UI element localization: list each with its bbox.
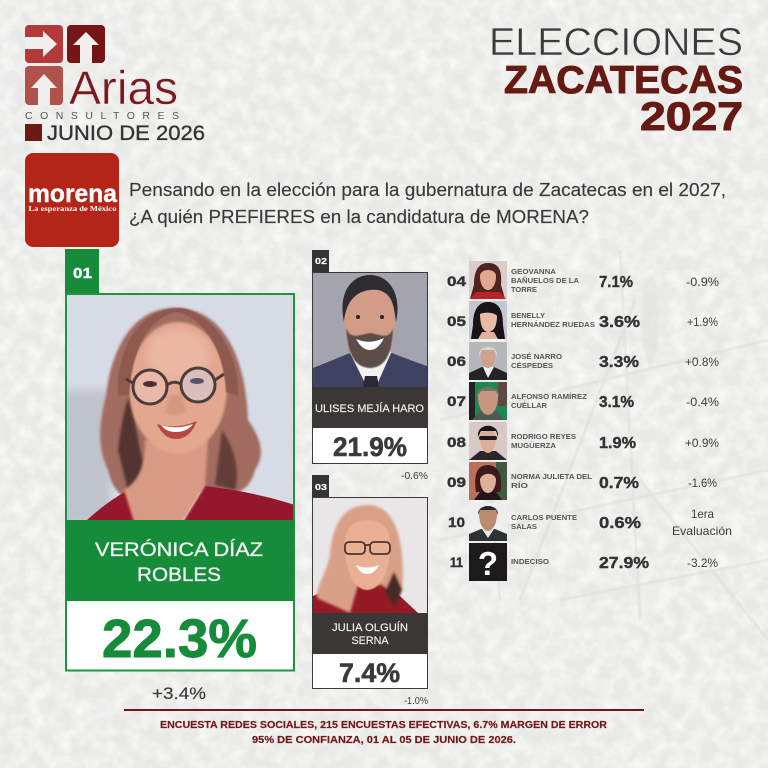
row 08 Rodrigo: 1.9% — [599, 435, 636, 452]
logo: morena: La esperanza de México — [28, 204, 117, 213]
title: ZACATECAS — [504, 59, 743, 102]
hair front — [118, 308, 238, 396]
percentage: 21.9% — [333, 432, 407, 462]
change: third place: -1.0% — [404, 695, 428, 707]
rank tab 02: 02 — [315, 257, 328, 266]
row 11 Indeciso — [450, 543, 718, 582]
footer methodology note — [160, 719, 607, 746]
row 05 Benelly: 05 — [447, 313, 466, 329]
name band — [66, 520, 294, 601]
row 05 Benelly — [447, 301, 718, 339]
icon: up arrow tile — [67, 25, 105, 63]
footer methodology note: ENCUESTA REDES SOCIALES, 215 ENCUESTAS EFECTIVAS, 6.7% MARGEN DE ERROR — [160, 719, 607, 731]
thumbnail: Alfonso — [469, 382, 507, 420]
row 07 Alfonso: -0.4% — [686, 397, 719, 409]
logo: morena — [25, 153, 119, 247]
rank tab 01: 01 — [73, 265, 92, 282]
row 04 Geovanna: -0.9% — [686, 277, 719, 289]
row 05 Benelly: BENELLY — [511, 311, 545, 320]
percentage: 7.4% — [339, 658, 400, 688]
portrait: Julia — [313, 498, 427, 613]
name band — [312, 613, 428, 654]
row 08 Rodrigo: MUGÜERZA — [511, 441, 557, 450]
name band: ULISES MEJÍA HARO — [315, 402, 424, 415]
thumbnail: Benelly — [469, 301, 507, 339]
panel: second place Ulises Mejía Haro — [312, 250, 428, 464]
row 09 Norma — [447, 462, 717, 500]
row 05 Benelly: HERNÁNDEZ RUEDAS — [511, 320, 595, 329]
rank tab 03: 03 — [315, 483, 328, 492]
row 04 Geovanna: 7.1% — [599, 274, 633, 291]
portrait: Verónica — [60, 295, 295, 525]
row 05 Benelly: 3.6% — [599, 314, 640, 331]
row 09 Norma: RÍO — [511, 481, 528, 490]
thumbnail: Rodrigo — [469, 422, 507, 460]
row 06 José Narro: JOSÉ NARRO — [511, 352, 562, 361]
title — [489, 21, 743, 139]
icon: up arrow light tile — [25, 66, 63, 105]
row 09 Norma: 09 — [447, 474, 466, 490]
percentage: 22.3% — [102, 609, 257, 669]
row 04 Geovanna: TORRE — [511, 285, 537, 294]
row 04 Geovanna: GEOVANNA — [511, 267, 557, 276]
footer rule — [124, 709, 644, 711]
thumbnail: Geovanna — [469, 261, 507, 299]
row 04 Geovanna: BAÑUELOS DE LA — [511, 276, 580, 285]
footer methodology note: 95% DE CONFIANZA, 01 AL 05 DE JUNIO DE 2026. — [252, 734, 516, 746]
row 10 Carlos: 10 — [448, 514, 465, 530]
panel: first place Verónica Díaz Robles — [60, 249, 295, 670]
row 08 Rodrigo: 08 — [447, 434, 466, 450]
row 10 Carlos — [448, 503, 732, 541]
row 11 Indeciso: INDECISO — [511, 557, 549, 566]
logo wordmark: Arias — [69, 61, 178, 114]
row 07 Alfonso — [447, 382, 719, 420]
portrait: Ulises — [313, 273, 427, 387]
row 11 Indeciso: 11 — [450, 554, 463, 570]
rank tab 02 — [312, 250, 329, 273]
blouse — [87, 492, 136, 520]
mouth — [157, 421, 197, 439]
rank tab 03 — [312, 475, 329, 498]
row 09 Norma: NORMA JULIETA DEL — [511, 472, 592, 481]
thumbnail: Norma — [469, 462, 507, 500]
row 10 Carlos: SALAS — [511, 522, 537, 531]
icon: question mark — [469, 543, 507, 582]
row 08 Rodrigo — [447, 422, 719, 460]
glasses — [126, 368, 224, 404]
question text: Pensando en la elección para la gubernatura de Zacatecas en el 2027, — [129, 179, 726, 200]
row 11 Indeciso: 27.9% — [599, 555, 649, 572]
icon: question mark: ? — [478, 545, 498, 582]
row 07 Alfonso: 3.1% — [599, 394, 634, 411]
icon: right arrow tile — [25, 25, 63, 63]
row 06 José Narro: CÉSPEDES — [511, 361, 553, 370]
logo: Arias Consultores — [25, 25, 179, 122]
row 10 Carlos: 0.6% — [599, 515, 641, 532]
row 10 Carlos: 1era — [691, 507, 714, 521]
row 09 Norma: -1.6% — [688, 478, 717, 490]
row 10 Carlos: Evaluación — [672, 524, 732, 538]
hair back — [100, 308, 261, 501]
logo subtitle: CONSULTORES — [25, 110, 179, 122]
rank tab 01 — [65, 249, 99, 294]
thumbnail: José — [469, 342, 507, 380]
row 05 Benelly: +1.9% — [687, 317, 718, 329]
neck — [124, 440, 208, 522]
row 06 José Narro: 3.3% — [599, 354, 639, 371]
row 06 José Narro: 06 — [447, 353, 466, 369]
date badge: JUNIO DE 2026 — [47, 122, 205, 145]
logo: morena: morena — [28, 180, 118, 208]
name band: SERNA — [352, 635, 389, 647]
row 06 José Narro — [447, 342, 719, 380]
title: 2027 — [640, 95, 743, 139]
row 10 Carlos: CARLOS PUENTE — [511, 513, 577, 522]
name band: JULIA OLGUÍN — [332, 621, 408, 634]
change: second place: -0.6% — [401, 470, 428, 482]
question text: ¿A quién PREFIERES en la candidatura de MORENA? — [129, 206, 589, 227]
face — [129, 322, 227, 454]
row 06 José Narro: +0.8% — [685, 357, 719, 369]
row 07 Alfonso: 07 — [447, 393, 466, 409]
row 08 Rodrigo: +0.9% — [685, 438, 719, 450]
row 08 Rodrigo: RODRIGO REYES — [511, 432, 576, 441]
name band — [312, 387, 428, 428]
row 07 Alfonso: ALFONSO RAMÍREZ — [511, 392, 587, 401]
panel: third place Julia Olguín Serna — [312, 475, 428, 688]
row 07 Alfonso: CUÉLLAR — [511, 401, 548, 410]
change: first place: +3.4% — [152, 684, 206, 703]
name band: VERÓNICA DÍAZ — [95, 538, 263, 561]
thumbnail: Carlos — [469, 503, 507, 541]
title: ELECCIONES — [489, 21, 743, 64]
row 11 Indeciso: -3.2% — [687, 558, 718, 570]
name band: ROBLES — [137, 564, 221, 586]
row 04 Geovanna: 04 — [447, 273, 466, 289]
question text — [129, 179, 726, 227]
row 09 Norma: 0.7% — [599, 475, 639, 492]
row 04 Geovanna — [447, 261, 719, 299]
